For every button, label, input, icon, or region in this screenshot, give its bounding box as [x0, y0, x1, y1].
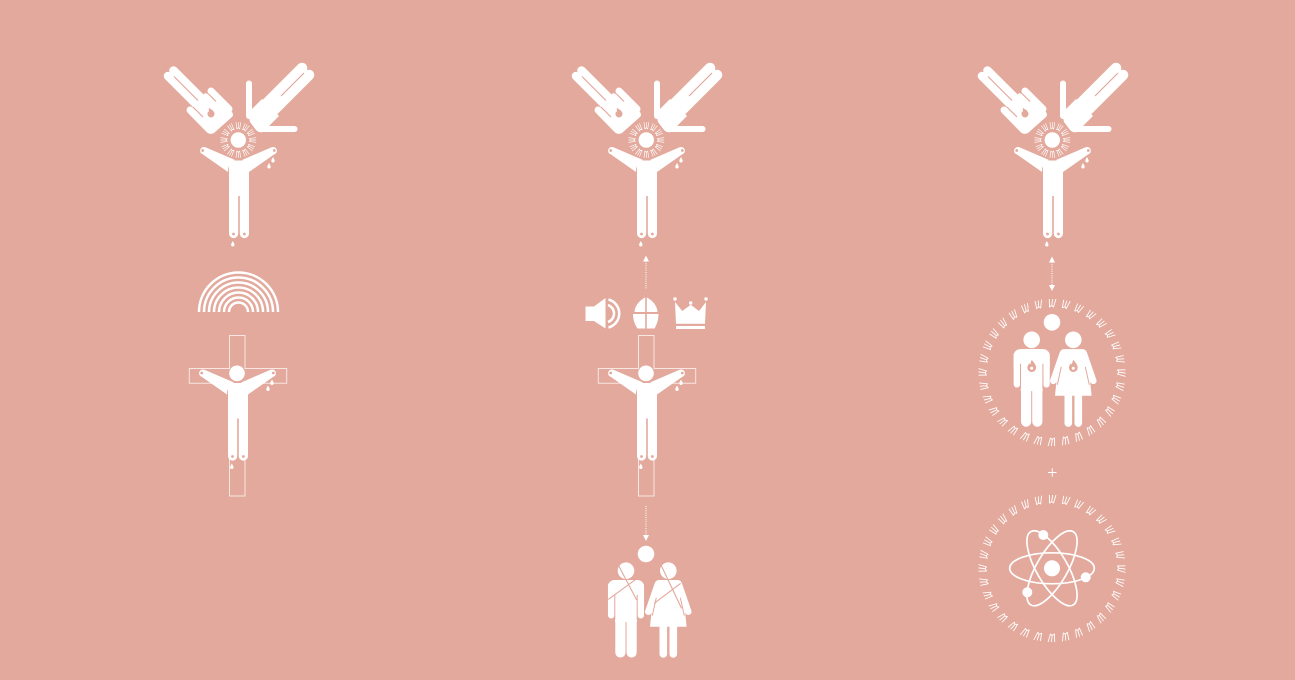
arrow: dotted up [643, 256, 649, 289]
trinity hands, sun and figure [576, 68, 717, 246]
circle: spirit [638, 546, 654, 562]
crucifix [189, 336, 287, 496]
icon: atom [1010, 524, 1094, 613]
crucifix [598, 336, 696, 496]
icon: speaker [586, 298, 619, 328]
icon: mitre [633, 296, 658, 329]
circle: spirit [1044, 314, 1060, 331]
arrow: dotted double [1049, 256, 1055, 291]
icon: crown [673, 297, 708, 329]
trinity hands, sun and figure [168, 68, 309, 246]
ring of light: atom [978, 495, 1126, 642]
column 1 [168, 68, 309, 496]
woman with flame [1053, 332, 1093, 423]
column 3 [978, 68, 1126, 642]
icon: rainbow [199, 273, 278, 312]
column 2 [576, 68, 717, 654]
trinity hands, sun and figure [982, 68, 1123, 246]
woman crossed out [648, 562, 688, 654]
arrow: dotted down [643, 506, 649, 541]
plus sign [1048, 468, 1056, 477]
man with flame [1014, 332, 1050, 422]
man crossed out [608, 562, 644, 652]
ring of light: people [978, 299, 1126, 446]
